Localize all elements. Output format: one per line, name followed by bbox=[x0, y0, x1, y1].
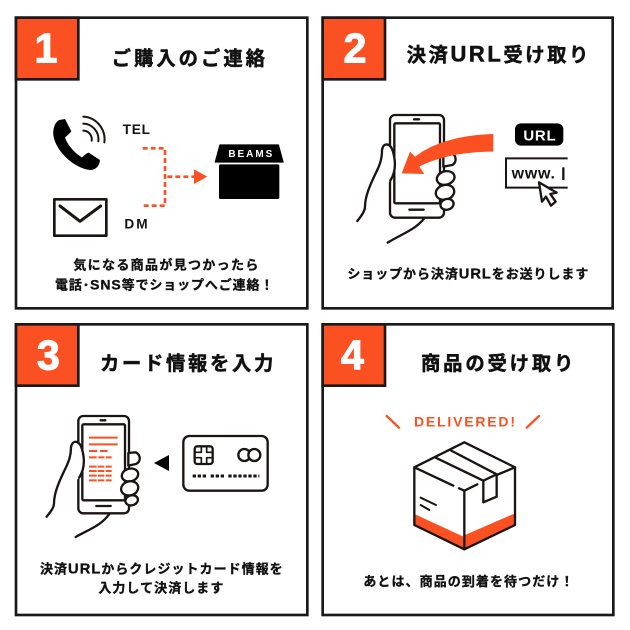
arrow: black triangle bbox=[154, 455, 169, 471]
caption: receive URL: ショップから決済URLをお送りします bbox=[347, 266, 588, 282]
icon: BEAMS shop: BEAMS bbox=[228, 149, 273, 160]
icon: cardboard box bbox=[414, 442, 515, 549]
icon: browser address bar and cursor bbox=[506, 158, 568, 206]
heading: receive goods: 商品の受け取り bbox=[421, 352, 573, 375]
icon: browser address bar and cursor: www. bbox=[511, 165, 555, 182]
step badge 2 bbox=[323, 18, 385, 79]
icon: mail envelope bbox=[54, 199, 106, 236]
icon: BEAMS shop bbox=[215, 145, 283, 199]
caption: card details bbox=[40, 561, 283, 596]
step badge 1 bbox=[16, 18, 78, 79]
label: TEL: TEL bbox=[123, 122, 150, 137]
panel: step 4 delivery bbox=[323, 324, 613, 615]
arrow: curved orange arrow to phone bbox=[402, 134, 493, 174]
caption: card details: 入力して決済します bbox=[98, 581, 223, 596]
heading: contact: ご購入のご連絡 bbox=[112, 47, 266, 70]
label: DELIVERED with ticks bbox=[387, 414, 539, 430]
label: DM: DM bbox=[124, 216, 148, 231]
caption: contact: 電話･SNS等でショップへご連絡！ bbox=[55, 277, 273, 293]
caption: contact: 気になる商品が見つかったら bbox=[73, 258, 258, 273]
arrow: dashed route to shop bbox=[143, 148, 207, 206]
icon: telephone bbox=[53, 117, 105, 170]
caption: card details: 決済URLからクレジットカード情報を bbox=[40, 561, 283, 577]
step badge 3 bbox=[16, 324, 78, 386]
step badge 2: 2 bbox=[343, 25, 366, 71]
caption: contact bbox=[55, 258, 273, 293]
heading: card details: カード情報を入力 bbox=[100, 353, 273, 375]
step badge 1: 1 bbox=[34, 25, 57, 71]
panel: step 1 contact bbox=[16, 18, 307, 308]
caption: receive goods: あとは、商品の到着を待つだけ！ bbox=[363, 574, 573, 589]
icon: hand holding phone with form bbox=[47, 416, 140, 537]
heading: receive URL: 決済URL受け取り bbox=[407, 42, 588, 67]
icon: credit card bbox=[183, 436, 268, 491]
step badge 4 bbox=[323, 324, 385, 386]
label: DELIVERED with ticks: DELIVERED! bbox=[414, 414, 515, 430]
step badge 3: 3 bbox=[37, 332, 60, 378]
badge: URL: URL bbox=[523, 127, 556, 144]
panel: step 2 receive URL bbox=[323, 18, 613, 308]
badge: URL bbox=[515, 123, 563, 146]
step badge 4: 4 bbox=[341, 332, 364, 378]
panel: step 3 card details bbox=[16, 324, 307, 615]
icon: hand holding phone bbox=[357, 115, 456, 243]
